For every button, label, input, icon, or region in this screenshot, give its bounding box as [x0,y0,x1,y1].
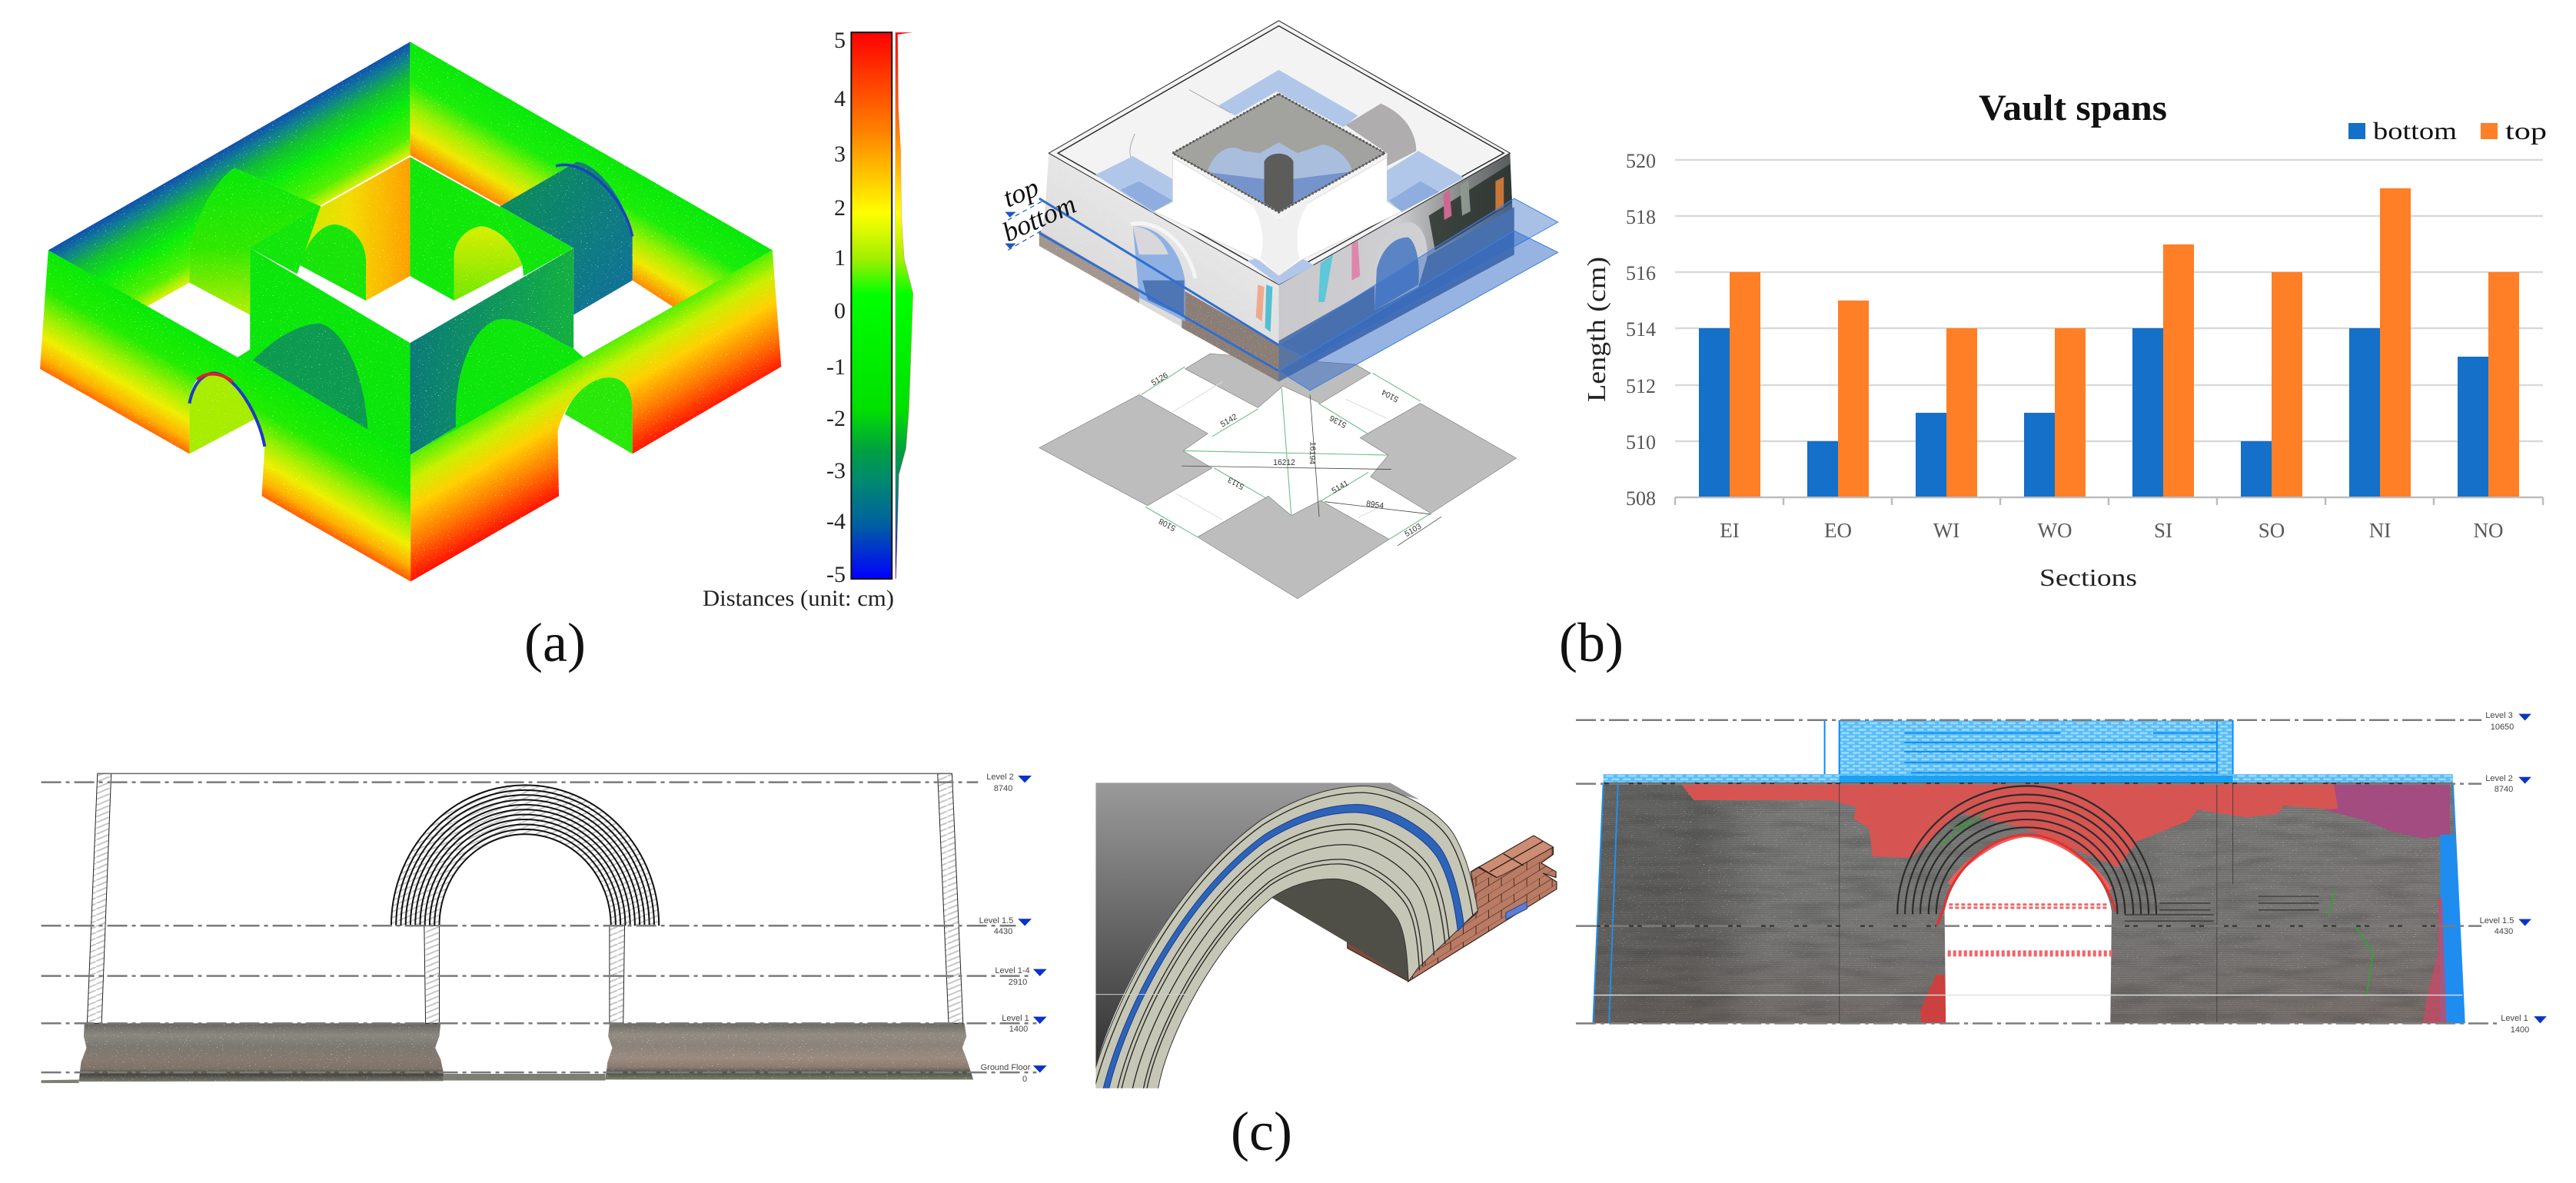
plan dimensions: 5104 [1381,387,1400,404]
arch rings [1897,786,2156,914]
level labels: Level 2 [2485,774,2513,783]
panel b: bar chart vault spans [1583,88,2547,591]
y axis values: 516 [1626,262,1656,284]
level labels: 8740 [994,784,1012,793]
upper blue band [1840,776,2233,783]
level labels: Ground Floor [981,1063,1031,1072]
plane edges on the left facade [1039,198,1278,371]
plan dimensions: 5141 [1331,479,1350,496]
roof inner border [1058,26,1504,278]
wall mottling [1593,783,2465,1023]
brick courses [1412,848,1556,979]
inner back wall left [288,156,410,301]
back vault edge [1130,90,1231,158]
plan dimensions: 5142 [1219,413,1239,430]
right green arch surface [410,319,584,455]
colour scale tick labels: 3 [834,141,846,167]
thin seam line [1095,994,1189,995]
vault shading curves [1239,188,1321,276]
photographic base [79,1023,973,1082]
panel c left: elevation drawing with levels [42,773,1047,1084]
plan dimensions: 5126 [1150,371,1170,388]
colour scale tick labels: 5 [834,28,846,53]
y axis values [1626,150,1656,510]
label b: (b) [1559,612,1624,673]
colour scale tick labels: -4 [826,509,846,534]
inner arch left interior [300,224,366,301]
plan dimensions: 16194 [1308,441,1317,465]
colour scale tick labels: 2 [834,195,846,221]
colour scale tick labels: 0 [834,298,846,324]
dark extrados surface [1095,783,1419,1068]
right arch opening [1374,238,1419,311]
arch opening [1945,836,2112,1023]
blue roof band [1604,774,2453,783]
y axis values: 520 [1626,150,1656,172]
inner courtyard opening [1172,94,1385,212]
level markers [1018,776,1047,1072]
red band under arch rings [1949,835,2110,889]
red deviation overlay [1681,784,2338,868]
y axis values: 512 [1626,375,1656,397]
panel a: deviation map of the point cloud [40,28,913,673]
y axis values: 508 [1626,487,1656,510]
label c: (c) [1231,1101,1292,1162]
level labels: Level 2 [986,773,1014,782]
plan dimensions: 5113 [1227,475,1245,490]
colour scale tick labels: -3 [826,458,846,484]
wall section hatches [87,773,963,1023]
chart title: Vault spans [1979,88,2167,128]
level labels: Level 1.5 [2480,916,2514,925]
back right wall [410,42,773,307]
distance histogram [896,32,913,579]
left arch rim [1131,223,1195,278]
upper blue hatched block [1840,720,2233,783]
level labels: Level 1.5 [979,916,1013,925]
y axis title: Length (cm) [1583,257,1611,402]
brick texture [1593,783,2465,1023]
plane bottom overlay [1278,231,1558,390]
arc highlights on the model [189,156,633,447]
colour scale tick labels: -5 [826,562,846,587]
plan dimensions: 5136 [1328,413,1348,429]
level labels [979,773,1031,1084]
top roof surface [1049,21,1510,284]
thin white seam [1593,995,2462,996]
plan dimensions: 5103 [1404,522,1423,539]
brick footing [1348,942,1408,982]
upper block lines [1825,720,2233,783]
front left outer wall [40,250,410,581]
y axis values: 510 [1626,431,1656,454]
level labels: Level 3 [2485,711,2513,720]
y axis values: 514 [1626,318,1656,341]
front right outer wall [410,250,781,581]
wall vertical tone [1593,783,2465,1023]
colour scale tick labels [826,28,846,587]
ring joints [1094,793,1473,1090]
3D distance colour model [40,42,781,581]
left vault [189,168,321,315]
panel c right: elevation with point cloud analysis [1576,711,2547,1035]
inner band right [500,206,573,276]
y axis values: 518 [1626,206,1656,228]
category labels: WI [1933,519,1959,542]
scale caption: Distances (unit: cm) [703,586,894,611]
brick top faces [1471,836,1553,878]
blue highlighted brick [1506,902,1527,919]
category labels: WO [2038,519,2072,542]
beige vault rings [1089,786,1477,1090]
ground strip [42,1074,606,1083]
right facade streaks [1256,164,1512,332]
level labels: 1400 [2511,1025,2529,1035]
dark pier [1265,154,1293,211]
label a: (a) [524,612,586,673]
right arch [1374,222,1427,311]
arch rings hatch [391,785,659,925]
left arch opening [1133,226,1185,321]
3D model with top and bottom planes [1039,21,1558,390]
inner back wall right [410,156,523,301]
left arch dark plane [1142,281,1184,317]
plan dimensions: 5108 [1158,516,1177,532]
back vault cylinder [1345,104,1416,166]
arch ring lines [391,785,659,925]
inner arch right interior [454,227,523,301]
category labels [1720,519,2503,542]
inner blue arch [1208,142,1351,211]
level labels: 4430 [994,927,1012,936]
hatched rim of opening [1172,94,1385,212]
darker inner plane patches [1120,181,1439,211]
right facade [1278,153,1514,382]
colour scale tick labels: 1 [834,245,846,271]
level labels: 8740 [2495,785,2513,794]
level labels: Level 1-4 [995,966,1030,975]
vault soffit [1271,879,1408,982]
colour scale tick labels: -1 [826,354,846,380]
bottom series bars [1699,328,2488,497]
panel c middle: vault rings and brick detail [1089,783,1560,1162]
red bottom strip on the edge [2423,898,2447,1023]
inner band left [250,206,321,274]
section level markers [1005,201,1043,250]
arch intrados red edge [1937,835,2116,925]
section label bottom: bottom [998,188,1081,248]
masonry wall [1593,783,2465,1023]
grey plan quadrants [1039,354,1516,599]
plan dimensions [1150,371,1423,539]
colour scale tick labels: -2 [826,406,846,431]
blue ring [1103,805,1464,1089]
back left wall [48,42,410,306]
category labels: EO [1824,519,1852,542]
panel b: isometric model with section planes and plan [998,21,1624,673]
level labels: 0 [1022,1075,1027,1084]
dark course lines across the wall [1597,783,2453,926]
front inner wall left [237,248,410,455]
inner dark plane [1210,171,1351,211]
category labels: SO [2259,519,2285,542]
level labels: 10650 [2491,723,2514,732]
left arch interior [189,373,256,454]
level markers [2518,714,2547,1023]
plane top overlay [1278,198,1558,361]
plan dimension lines [1142,367,1441,546]
section label top: top [999,171,1043,213]
left facade [1039,153,1278,382]
blue edge strip [2440,835,2465,1023]
right arch interior [565,377,633,454]
dashed red scan bars [1948,905,2115,953]
category labels: EI [1720,519,1740,542]
legend [2348,117,2547,145]
top edge lines [98,773,952,774]
category labels: SI [2154,519,2172,542]
level labels: Level 1 [2501,1014,2528,1023]
legend: bottom [2373,117,2457,145]
level labels: 4430 [2495,927,2513,936]
plan dimensions: 16212 [1273,459,1295,467]
level labels [2480,711,2529,1035]
plan dimensions: 8954 [1365,500,1384,511]
purple overlay [2323,784,2450,839]
level labels: Level 1 [1002,1014,1029,1023]
dark lower right facade under the planes [1278,207,1514,382]
x axis title: Sections [2039,563,2137,591]
colour scale bar [851,32,913,579]
brick wall [1408,836,1557,982]
front inner wall right [410,248,573,455]
legend: top [2505,117,2547,145]
structural vertical lines [1593,783,2465,1023]
section plan [1039,354,1516,599]
level labels: 1400 [1009,1025,1028,1034]
white vault and inner walls [1154,158,1401,276]
level labels: 2910 [1009,978,1027,987]
top series bars [1730,188,2519,497]
level lines [1576,720,2498,1023]
right vault [500,161,633,315]
brick top joints [1478,842,1543,878]
left arch light vault [1133,227,1168,254]
blue plane visible through roof [1095,70,1464,284]
colour scale tick labels: 4 [834,86,846,111]
left dark vault [253,324,367,429]
arch spring courses [2125,896,2319,921]
category labels: NO [2474,519,2503,542]
category labels: NI [2369,519,2391,542]
left jamb red [1920,975,1947,1022]
inner corner line [1278,220,1279,276]
green vegetation [1939,812,2373,994]
